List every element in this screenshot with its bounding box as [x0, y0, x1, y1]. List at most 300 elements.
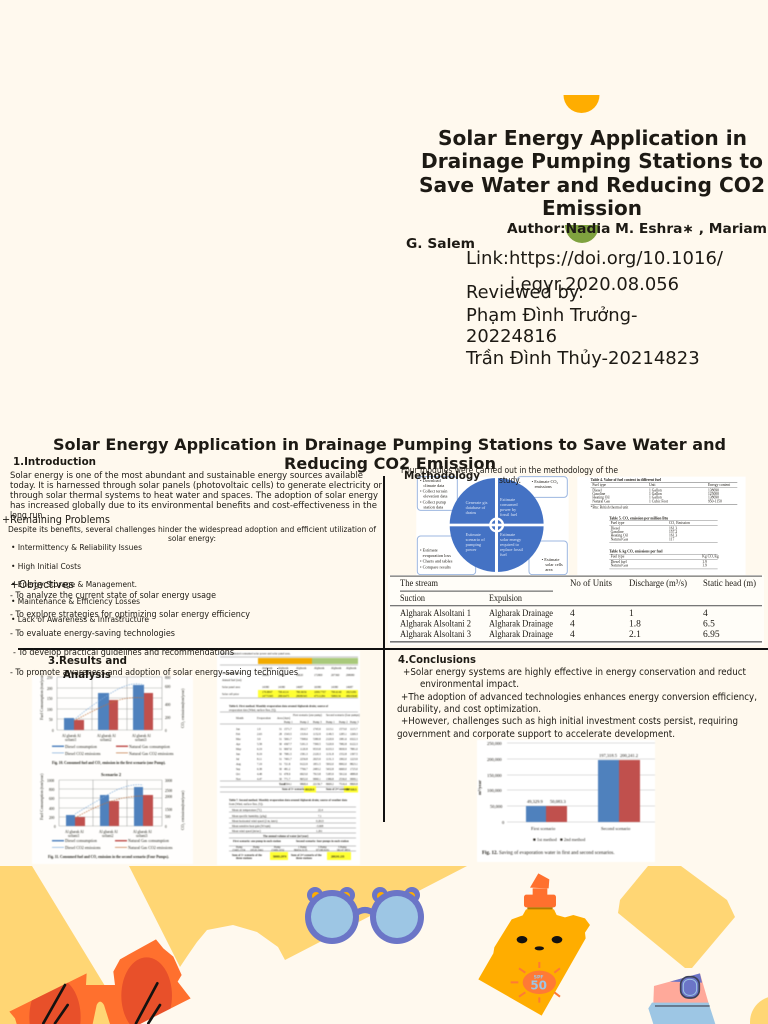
icon: input box bottom left: • Compare results [420, 564, 451, 569]
article link [466, 248, 724, 295]
introduction paragraph: Solar energy is one of the most abundant and sustainable energy sources available [10, 471, 363, 481]
table: fuel and emissions: Algharak [346, 667, 357, 670]
panel: fuel data tables: 1.9 [702, 560, 707, 564]
chart: scenario 2: 3000 [165, 779, 172, 783]
table: first method evaporation: Apr [236, 743, 240, 746]
panel: fuel data tables: Fuel type [611, 555, 625, 559]
title: Drainage Pumping Stations to [421, 149, 763, 173]
chart: scenario 2: Diesel CO2 emissions [65, 845, 101, 850]
table: first method evaporation: 9930.9 [339, 748, 347, 751]
table: second method evaporation: Mean specific humidity, (g/kg) [232, 815, 267, 818]
chart: saving of evaporation water: 150,000 [487, 773, 502, 779]
table: first method evaporation: Second scenario (four pumps) [326, 714, 360, 717]
table: first method evaporation: 1115.7 [350, 728, 358, 731]
circular process diagram: Estimate [466, 532, 481, 537]
table: first method evaporation: 6322.3 [350, 738, 358, 741]
table: first method evaporation: 5432.8 [326, 768, 334, 771]
reviewers [465, 282, 700, 369]
table: second method evaporation: 3 Pump [338, 846, 347, 849]
chart: saving of evaporation water: 250,000 [487, 741, 502, 747]
table: first method evaporation: 1992.0 [339, 758, 347, 761]
chart: scenario 1: Natural Gas consumption [129, 744, 170, 749]
icon: input box top left [417, 477, 457, 510]
panel: results heading: Analysis [63, 668, 111, 681]
table: first method evaporation: 1319.4 [300, 733, 308, 736]
panel: fuel data tables: Natural Gas [611, 564, 629, 568]
table: second method evaporation: Pump [253, 846, 260, 849]
table: first method evaporation: 22156.7 [313, 783, 323, 786]
table: fuel and emissions: 780.9656 [296, 691, 307, 694]
heading: objectives: +Objectives [10, 579, 74, 591]
circular process diagram: scenario of [466, 537, 485, 542]
table: second method evaporation: -3.668 [316, 825, 324, 828]
icon: spray bottle [648, 973, 715, 1024]
circular process diagram: Generate gis [466, 500, 488, 505]
panel: methodology text [401, 466, 618, 486]
table: first method evaporation: 1581.3 [300, 753, 308, 756]
chart: scenario 1: 400 [165, 703, 171, 707]
icon: sunscreen bottle SPF 50 [478, 873, 590, 1016]
icon: input box top left: station data [423, 504, 443, 509]
chart: scenario 2: 0 [54, 825, 56, 829]
chart: scenario 2: Fig. 11. Consumed fuel and CO₂ emission in the second scenario (Four Pumps). [48, 855, 169, 859]
panel: results heading [48, 654, 127, 681]
table: second method evaporation: 15469.1032 [271, 849, 285, 852]
table: second method evaporation: Mean air temperature (°C) [232, 809, 262, 812]
authors [406, 222, 767, 252]
circular process diagram: Estimate [500, 497, 515, 502]
icon: input box bottom right: solar cells [545, 562, 563, 567]
table: first method evaporation: 8823.1 [350, 763, 358, 766]
icon: input box top left: • Download [420, 478, 441, 483]
table: second method evaporation: 0.2613 [316, 820, 324, 823]
table: first method evaporation: Aug [236, 763, 241, 766]
table: first method evaporation: 9868.4 [300, 783, 308, 786]
table: first method evaporation: 2025.9 [313, 758, 321, 761]
chart: scenario 1: Al gharak Al [97, 734, 116, 738]
objectives list: - To analyze the current state of solar energy usage [10, 591, 216, 601]
table: first method evaporation: 6.19 [257, 748, 262, 751]
table: first method evaporation: 5061.7 [284, 738, 292, 741]
table: fuel and emissions: 18620 [296, 674, 304, 677]
problems intro text [8, 525, 376, 543]
article link: Link:https://doi.org/10.1016/ [466, 248, 724, 269]
title: Emission [542, 196, 642, 220]
table: first method evaporation: 49329.9 [305, 788, 315, 792]
chart: scenario 2 [39, 772, 185, 859]
table: second method evaporation: 22.4 [318, 809, 323, 812]
panel: fuel data tables: Natural Gas [592, 499, 610, 503]
table: first method evaporation: 1149.5 [326, 733, 334, 736]
table: first method evaporation: 8.11 [257, 758, 262, 761]
table: second method evaporation: 3 Pump [318, 846, 327, 849]
table: first method evaporation: 7766.7 [300, 768, 308, 771]
chart: saving of evaporation water: ■ 2nd method [560, 837, 586, 842]
table: first method evaporation: 4889.8 [350, 773, 358, 776]
problems list: • Lack of Awareness & Infrastructure [11, 615, 149, 624]
circular process diagram: power by [500, 507, 517, 512]
panel: fuel data tables: Unit [649, 483, 655, 487]
conclusions text: +However, challenges such as high initial investment costs persist, requiring [401, 716, 738, 727]
icon: blue sunglasses [305, 887, 424, 944]
table: second method evaporation: The annual volume of water (m³/year) [263, 835, 308, 838]
table: fuel and emissions: 28089345 [296, 695, 308, 698]
table: first method evaporation: 2120.3 [313, 753, 321, 756]
table: first method evaporation: 771.7 [284, 778, 291, 781]
article link: j.egyr.2020.08.056 [509, 274, 679, 295]
table: first method evaporation: 30 [279, 743, 282, 746]
table: first method evaporation: 6122.3 [350, 743, 358, 746]
conclusions text: +Solar energy systems are highly effective in energy conservation and reduct [403, 667, 746, 678]
chart: scenario 2: 200 [49, 816, 55, 820]
table: second method evaporation: 96147.9831 [337, 849, 351, 852]
panel: fuel data tables: Table 5. CO₂ emission per million Btu [609, 516, 668, 520]
circular process diagram: pumping [466, 542, 482, 547]
table: second method evaporation: three stations [296, 857, 313, 860]
panel: pumping stations table: Algharak Drainage [489, 609, 553, 619]
panel: results heading: 3.Results and [48, 654, 127, 667]
icon: sunscreen bottle SPF 50: 50 [530, 979, 547, 993]
table: first method evaporation: Sum of 1ˢᵗ scenario [282, 788, 305, 791]
table: first method evaporation: 1152.9 [313, 733, 321, 736]
heading: conclusions: 4.Conclusions [398, 654, 476, 666]
table: first method evaporation: Oct [236, 773, 240, 776]
table: first method evaporation: 1912.7 [300, 728, 308, 731]
panel: pumping stations table: Algharak Alsoltani 3 [400, 630, 471, 640]
table: first method evaporation: 30 [279, 768, 282, 771]
table: fuel and emissions: Consumed power [222, 672, 242, 675]
table: first method evaporation: 3.9 [257, 738, 261, 741]
panel: results tables [217, 651, 360, 865]
chart: scenario 1: Al gharak Al [62, 734, 81, 738]
panel: fuel data tables: 161.3 [669, 526, 677, 530]
table: first method evaporation: 5380.8 [313, 738, 321, 741]
icon: input box bottom right [529, 541, 567, 575]
table: second method evaporation: Mean horizontal wind speed (2 m, km/s) [232, 820, 278, 823]
reviewers: 20224816 [466, 326, 557, 347]
panel: methodology diagram [416, 477, 569, 576]
panel: fuel data tables: Heating Oil [611, 534, 628, 538]
table: first method evaporation: May [236, 748, 242, 751]
circular process diagram: drains [466, 510, 477, 515]
chart: saving of evaporation water: 200,000 [487, 757, 502, 763]
panel divider lines [18, 476, 768, 822]
panel: pumping stations table: Suction [400, 594, 425, 604]
icon: input box top right: emissions [535, 484, 552, 489]
table: first method evaporation: Jun [236, 753, 240, 756]
table: first method evaporation: Feb [236, 733, 241, 736]
table: first method evaporation: 5932.0 [326, 763, 334, 766]
chart: scenario 1: 0 [52, 729, 54, 733]
objectives list [10, 591, 298, 678]
panel: fuel data tables: 138690 [708, 488, 719, 492]
problems intro text: solar energy: [168, 534, 216, 543]
table: second method evaporation: Table 7. Second method. Monthly evaporation data around Algharak drain; source of weather data [229, 799, 348, 802]
table: fuel and emissions: 48643640 [346, 695, 358, 698]
panel: pumping stations table: Static head (m) [703, 578, 756, 589]
table: second method evaporation: 15465.1554 [232, 849, 246, 852]
table: first method evaporation: 8.19 [257, 753, 262, 756]
panel: fuel data tables: 1 Gallon [649, 488, 662, 492]
table: first method evaporation: 30 [279, 778, 282, 781]
panel: pumping stations table: 4 [703, 609, 708, 619]
table: first method evaporation: 7.19 [257, 763, 262, 766]
table: second method evaporation: 97198.9181 [316, 849, 330, 852]
table: fuel and emissions: 14687 [346, 686, 354, 689]
table: first method evaporation: Pump 2 [300, 721, 309, 724]
chart: scenario 2: 600 [49, 797, 55, 801]
table: first method evaporation: First scenario (one pump) [293, 714, 322, 717]
circular process diagram: replace fossil [500, 547, 524, 552]
table: second method evaporation: 200241.235 [331, 856, 345, 858]
problems list [11, 543, 149, 624]
table: first method evaporation: Evaporation [257, 717, 271, 720]
table: second method evaporation: Mean sensitive heat gain (W/sqm) [232, 825, 270, 828]
table: first method evaporation: 9999.1 [350, 778, 358, 781]
conclusions text: environmental impact. [420, 679, 519, 690]
table: first method evaporation: 1725.0 [350, 768, 358, 771]
chart: scenario 1: 800 [165, 676, 171, 680]
icon: input box top left: climate data [423, 483, 444, 488]
circular process diagram: Estimate [500, 532, 515, 537]
panel: main poster heading: Solar Energy Application in Drainage Pumping Stations to Save Water and [53, 435, 726, 454]
table: first method evaporation: 4.48 [257, 773, 262, 776]
panel: pumping stations table: 4 [570, 630, 575, 640]
table: fuel and emissions: Annual fuel (ton) [222, 679, 241, 682]
table: first method evaporation: Sum of 2ⁿᵈ scenario [326, 788, 350, 791]
table: first method evaporation: 1223.9 [350, 758, 358, 761]
decorative green half circle [565, 225, 599, 243]
table: first method evaporation: 6660.0 [339, 768, 347, 771]
panel: fuel data tables: Fuel type [592, 483, 606, 487]
panel: fuel data tables: Fuel type [611, 521, 625, 525]
table: first method evaporation: 7390.5 [313, 743, 321, 746]
chart: saving of evaporation water: ■ 1st method [533, 837, 557, 842]
circular process diagram [449, 477, 544, 573]
reviewers: Phạm Đình Trưởng- [466, 305, 638, 326]
table: first method evaporation: 1386.8 [326, 778, 334, 781]
authors: Author:Nadia M. Eshra∗ , Mariam [507, 222, 767, 237]
table: first method evaporation: 1571.7 [284, 728, 292, 731]
panel: remaining problems [2, 514, 376, 624]
table: first method evaporation: 31 [279, 738, 282, 741]
icon: input box bottom right: area [545, 567, 553, 572]
panel: pumping stations table: 1.8 [629, 620, 641, 630]
introduction paragraph: today. It is harnessed through solar panels (photovoltaic cells) to generate electricity or [10, 481, 382, 491]
introduction paragraph: through solar thermal systems to heat water and spaces. The adoption of solar energy [10, 491, 378, 501]
table: first method evaporation: 1397.5 [350, 753, 358, 756]
table: first method evaporation: 8669.2 [326, 783, 334, 786]
table: fuel and emissions: Solar cell price [222, 693, 240, 696]
icon: input box top left: • Collect pump [420, 499, 446, 504]
chart: scenario 1: Al gharak Al [132, 734, 151, 738]
problems list: • Energy Storage & Management. [11, 580, 137, 589]
table: first method evaporation: Month [236, 717, 244, 720]
table: first method evaporation: 7913.8 [313, 773, 321, 776]
panel: fuel data tables: 161.3 [669, 534, 677, 538]
table: first method evaporation: 30 [279, 753, 282, 756]
table: first method evaporation: 7881.0 [350, 748, 358, 751]
panel: pumping stations table: Algharak Drainage [489, 620, 553, 630]
table: first method evaporation: 2536.0 [339, 778, 347, 781]
table: first method evaporation: evaporation data (Wind, surface flux, [5]). [229, 709, 277, 712]
table: second method evaporation: from (Wind, surface flux, [5]). [229, 803, 263, 806]
table: second method evaporation: Mean wind speed (m/sec) [232, 830, 261, 833]
table: second method evaporation: Sum of 2ⁿᵈ scenario of the [291, 854, 322, 857]
panel: fuel data tables: Gasoline [611, 530, 624, 534]
table: first method evaporation: 9067.0 [284, 748, 292, 751]
panel: fuel data tables: Diesel [611, 526, 620, 530]
table: fuel and emissions: 14380 [331, 686, 339, 689]
chart: saving of evaporation water: Fig. 12. Saving of evaporation water in first and second scenarios. [482, 851, 615, 856]
panel: fuel data tables: 1 Cubic Foot [649, 499, 668, 503]
methodology description: Four modules were carried out in the methodology of the [401, 466, 618, 476]
table: second method evaporation [229, 799, 356, 860]
chart: scenario 2: soltani2 [102, 834, 114, 838]
chart: scenario 2: Natural Gas CO2 emissions [128, 845, 173, 850]
table: fuel and emissions: Algharak [296, 667, 307, 670]
problems list: • Intermittency & Reliability Issues [11, 543, 142, 552]
chart: fuel consumption scenarios [32, 673, 193, 864]
chart: saving of evaporation water: m³/year [477, 780, 482, 795]
table: first method evaporation: 6133.3 [326, 748, 334, 751]
chart: scenario 1: Natural Gas CO2 emissions [129, 751, 174, 756]
title [419, 126, 765, 220]
panel: pumping stations table: Algharak Drainage [489, 630, 553, 640]
table: first method evaporation: Table 6. First method. Monthly evaporation data around Algharak drain; source of [229, 705, 328, 708]
chart: scenario 2: 0 [165, 825, 167, 829]
chart: scenario 2: 1000 [47, 779, 54, 783]
table: first method evaporation: 7981.5 [284, 753, 292, 756]
chart: scenario 1: 100 [47, 708, 53, 712]
chart: saving of evaporation water: 200,241.2 [620, 753, 638, 759]
panel: main poster heading: Reducing CO2 Emission [284, 454, 496, 473]
table: fuel and emissions: 799.4114 [278, 691, 289, 694]
problems intro text: Despite its benefits, several challenges hinder the widespread adoption and efficient utilization of [8, 525, 376, 534]
circular process diagram: fuel [500, 552, 508, 557]
circular process diagram: solar energy [500, 537, 522, 542]
panel: fuel data tables: Kg CO₂/kg [702, 555, 719, 559]
table: fuel and emissions: 14687 [296, 686, 304, 689]
objectives list: - To explore strategies for optimizing solar energy efficiency [10, 610, 250, 620]
panel: fuel data tables: 1 Gallon [649, 496, 662, 500]
table: fuel and emissions: 28816475 [278, 695, 290, 698]
chart: saving of evaporation water: 197,318.5 [599, 753, 618, 759]
chart: scenario 2: Al gharak Al [65, 830, 84, 834]
table: first method evaporation: 1113.1 [326, 728, 334, 731]
icon: sunscreen bottle SPF 50: SPF [534, 975, 544, 981]
table: second method evaporation: Sum of 1ˢᵗ scenario of the [232, 854, 263, 857]
table: first method evaporation: 28 [279, 733, 282, 736]
panel: pumping stations table: 4 [570, 609, 575, 619]
icon: input box bottom left: • Charts and tables [420, 558, 453, 563]
objectives list: - To evaluate energy-saving technologies [10, 629, 175, 639]
chart: scenario 2: CO₂ emissions(ton/year) [180, 790, 185, 830]
panel: fuel data tables: Table 4. Value of fuel content in different fuel [591, 478, 661, 482]
heading: introduction: 1.Introduction [13, 455, 96, 468]
table: fuel and emissions [220, 652, 358, 698]
table: fuel and emissions: 14771945 [262, 695, 274, 698]
chart: scenario 1: Fuel Consumption (ton/year) [39, 673, 44, 720]
chart: saving of evaporation water: 50,083.3 [550, 799, 566, 805]
table: first method evaporation: 481.2 [284, 768, 291, 771]
table: first method evaporation: 5912.6 [339, 773, 347, 776]
chart: saving of evaporation water: 100,000 [487, 788, 502, 794]
table: first method evaporation: 9533.8 [313, 748, 321, 751]
table: fuel and emissions: 172800 [314, 674, 323, 677]
table: first method evaporation: 2483.2 [313, 768, 321, 771]
table: first method evaporation: 9990.1 [313, 778, 321, 781]
panel: pumping stations table: Algharak Alsoltani 1 [400, 609, 471, 619]
table: first method evaporation: 5120.9 [326, 743, 334, 746]
panel: pumping stations table: 2.1 [629, 630, 641, 640]
table: first method evaporation: 9122.9 [300, 763, 308, 766]
chart: scenario 1: 250 [47, 676, 53, 680]
table: first method evaporation: 1269.3 [350, 733, 358, 736]
panel: fuel data tables: 138690 [708, 496, 719, 500]
table: fuel and emissions: 179.8847 [262, 691, 273, 694]
table: fuel and emissions: 14380 [262, 686, 270, 689]
table: fuel and emissions: 1823.081 [346, 691, 357, 694]
panel: fuel data tables: 117 [669, 537, 674, 541]
panel: fuel data tables: *Btu: British thermal unit [591, 506, 628, 510]
circular process diagram: required to [500, 542, 519, 547]
chart: scenario 1: soltani1 [65, 738, 77, 742]
panel: fuel data tables: Natural Gas [611, 537, 629, 541]
table: first method evaporation: 7491.7 [284, 758, 292, 761]
table: second method evaporation: 86454.3135 [294, 849, 308, 852]
panel: fuel data tables: 125000 [708, 492, 719, 496]
conclusions text: durability, and cost optimization. [397, 704, 541, 715]
table: first method evaporation: 8594.1 [284, 783, 292, 786]
table: second method evaporation: three stations [236, 857, 253, 860]
chart: scenario 1: soltani2 [100, 738, 112, 742]
table: first method evaporation [220, 705, 360, 792]
table: second method evaporation: 50083.2974 [273, 856, 287, 858]
table: fuel and emissions: 298080 [346, 674, 355, 677]
chart: scenario 2: Al gharak Al [99, 830, 118, 834]
circular process diagram: database of [466, 505, 486, 510]
chart: scenario 1: Fig. 10. Consumed fuel and CO₂ emission in the first scenario (one Pump). [52, 761, 166, 765]
introduction paragraph: has increased globally due to its environmental benefits and cost-effectiveness in the [10, 501, 377, 511]
panel: pumping stations table: Expulsion [489, 594, 522, 604]
title: Solar Energy Application in [438, 126, 747, 150]
table: first method evaporation: 721.8 [284, 763, 291, 766]
icon: input box top left: • Collect terrain [420, 489, 448, 494]
table: first method evaporation: Jul [236, 758, 239, 761]
icon: input box top right [517, 477, 567, 497]
icon: input box bottom left: • Estimate [420, 548, 438, 553]
table: first method evaporation: Pump 2 [339, 721, 348, 724]
table: fuel and emissions: 207360 [331, 674, 340, 677]
table: first method evaporation: Pump 1 [284, 721, 293, 724]
table: second method evaporation: 1.261 [316, 830, 323, 833]
table: first method evaporation: Nov [236, 778, 241, 781]
chart: saving of evaporation water: 0 [502, 820, 505, 825]
table: first method evaporation: 4367.7 [284, 743, 292, 746]
panel: pumping stations table: Algharak Alsoltani 2 [400, 620, 471, 630]
panel: introduction [10, 455, 382, 521]
table: first method evaporation: 2256.8 [300, 758, 308, 761]
table: first method evaporation: Mar [236, 738, 241, 741]
bottom decorative yellow shapes [0, 866, 768, 1024]
panel: conclusions [397, 654, 757, 740]
table: first method evaporation: 1120.8 [300, 748, 308, 751]
table: first method evaporation: 1285.1 [339, 733, 347, 736]
table: first method evaporation: 1543.5 [284, 733, 292, 736]
panel: fuel data tables: 950-1150 [708, 499, 722, 503]
table: first method evaporation: 8992.0 [339, 763, 347, 766]
